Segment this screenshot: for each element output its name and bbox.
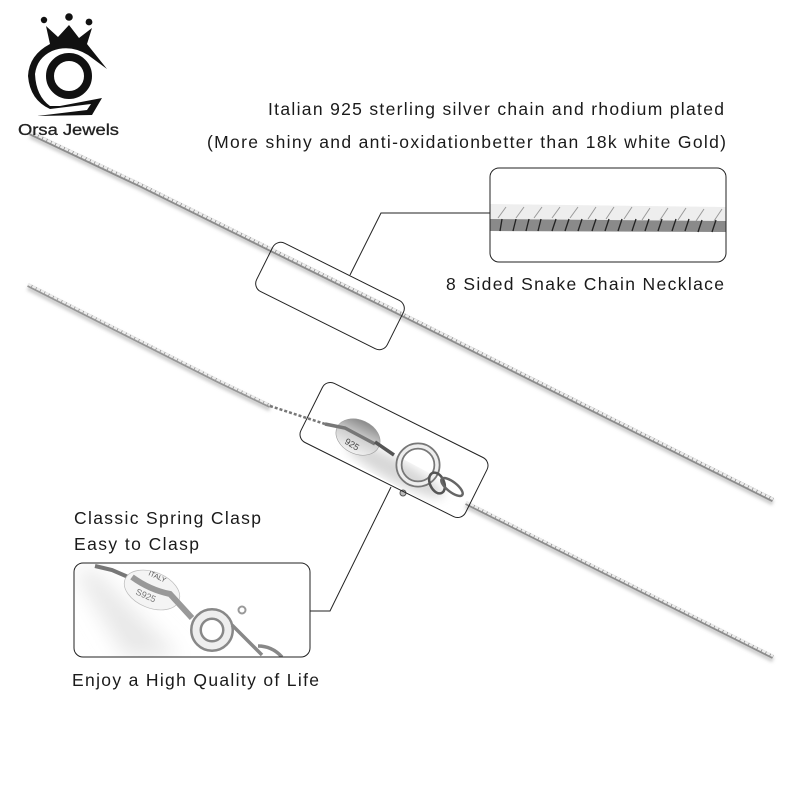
leader line to chain inset [350,213,490,275]
caption: chain name: 8 Sided Snake Chain Necklace [446,274,724,294]
inset: clasp close-up: S925 [134,587,157,604]
upper snake chain [30,132,773,503]
lower snake chain [28,284,773,660]
clasp caption: Classic Spring Clasp [74,508,261,528]
logo [18,13,119,139]
clasp caption: Easy to Clasp [74,534,199,554]
inset: clasp close-up [74,562,310,657]
leader line to clasp inset [310,487,391,611]
inset: clasp close-up: ITALY [147,570,167,584]
clasp on the main chain: 925 [343,436,361,453]
heading line 2: (More shiny and anti-oxidationbetter than 18k white Gold) [207,132,726,152]
inset: snake chain close-up [490,168,726,262]
heading line 1: Italian 925 sterling silver chain and rhodium plated [268,99,724,119]
clasp on the main chain [325,412,465,506]
clasp caption [74,508,261,554]
logo: Orsa Jewels [18,122,119,139]
tagline: Enjoy a High Quality of Life [72,670,319,690]
callout box on clasp [297,379,491,521]
callout box on upper chain [253,239,407,353]
